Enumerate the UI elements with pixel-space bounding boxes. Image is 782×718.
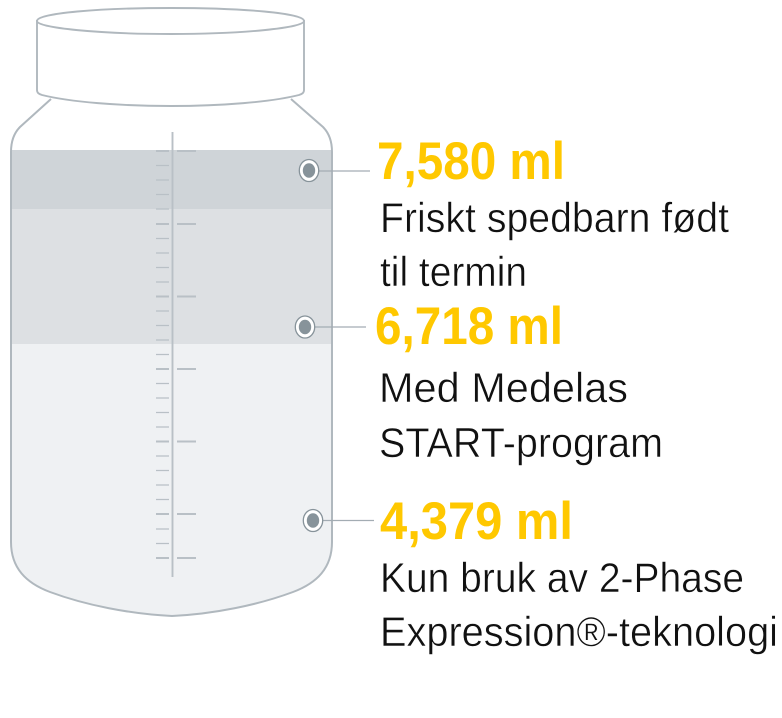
caption: healthy term infant: til termin <box>380 248 527 295</box>
value: 4,379 ml: 4,379 ml <box>380 492 573 551</box>
value: 6,718 ml: 6,718 ml <box>375 297 563 356</box>
caption: 2-Phase Expression only: Kun bruk av 2-Phase <box>380 554 744 601</box>
value: 7,580 ml: 7,580 ml <box>377 132 565 191</box>
bottle outline <box>11 99 332 616</box>
band: START programme <box>0 209 345 344</box>
band: 2-Phase only <box>12 344 331 615</box>
caption: 2-Phase Expression only <box>380 554 778 655</box>
marker: 7,580 ml <box>299 160 370 182</box>
caption: START programme: START-program <box>379 419 663 466</box>
liquid bands <box>0 150 345 624</box>
bottle cap <box>37 8 304 106</box>
marker: 4,379 ml <box>303 510 374 532</box>
caption: START programme <box>379 364 663 466</box>
caption: healthy term infant <box>380 194 729 295</box>
caption: START programme: Med Medelas <box>379 364 628 411</box>
caption: healthy term infant: Friskt spedbarn født <box>380 194 729 241</box>
marker: 6,718 ml <box>295 316 366 338</box>
band: healthy term infant <box>0 150 345 209</box>
measuring scale <box>156 132 196 577</box>
